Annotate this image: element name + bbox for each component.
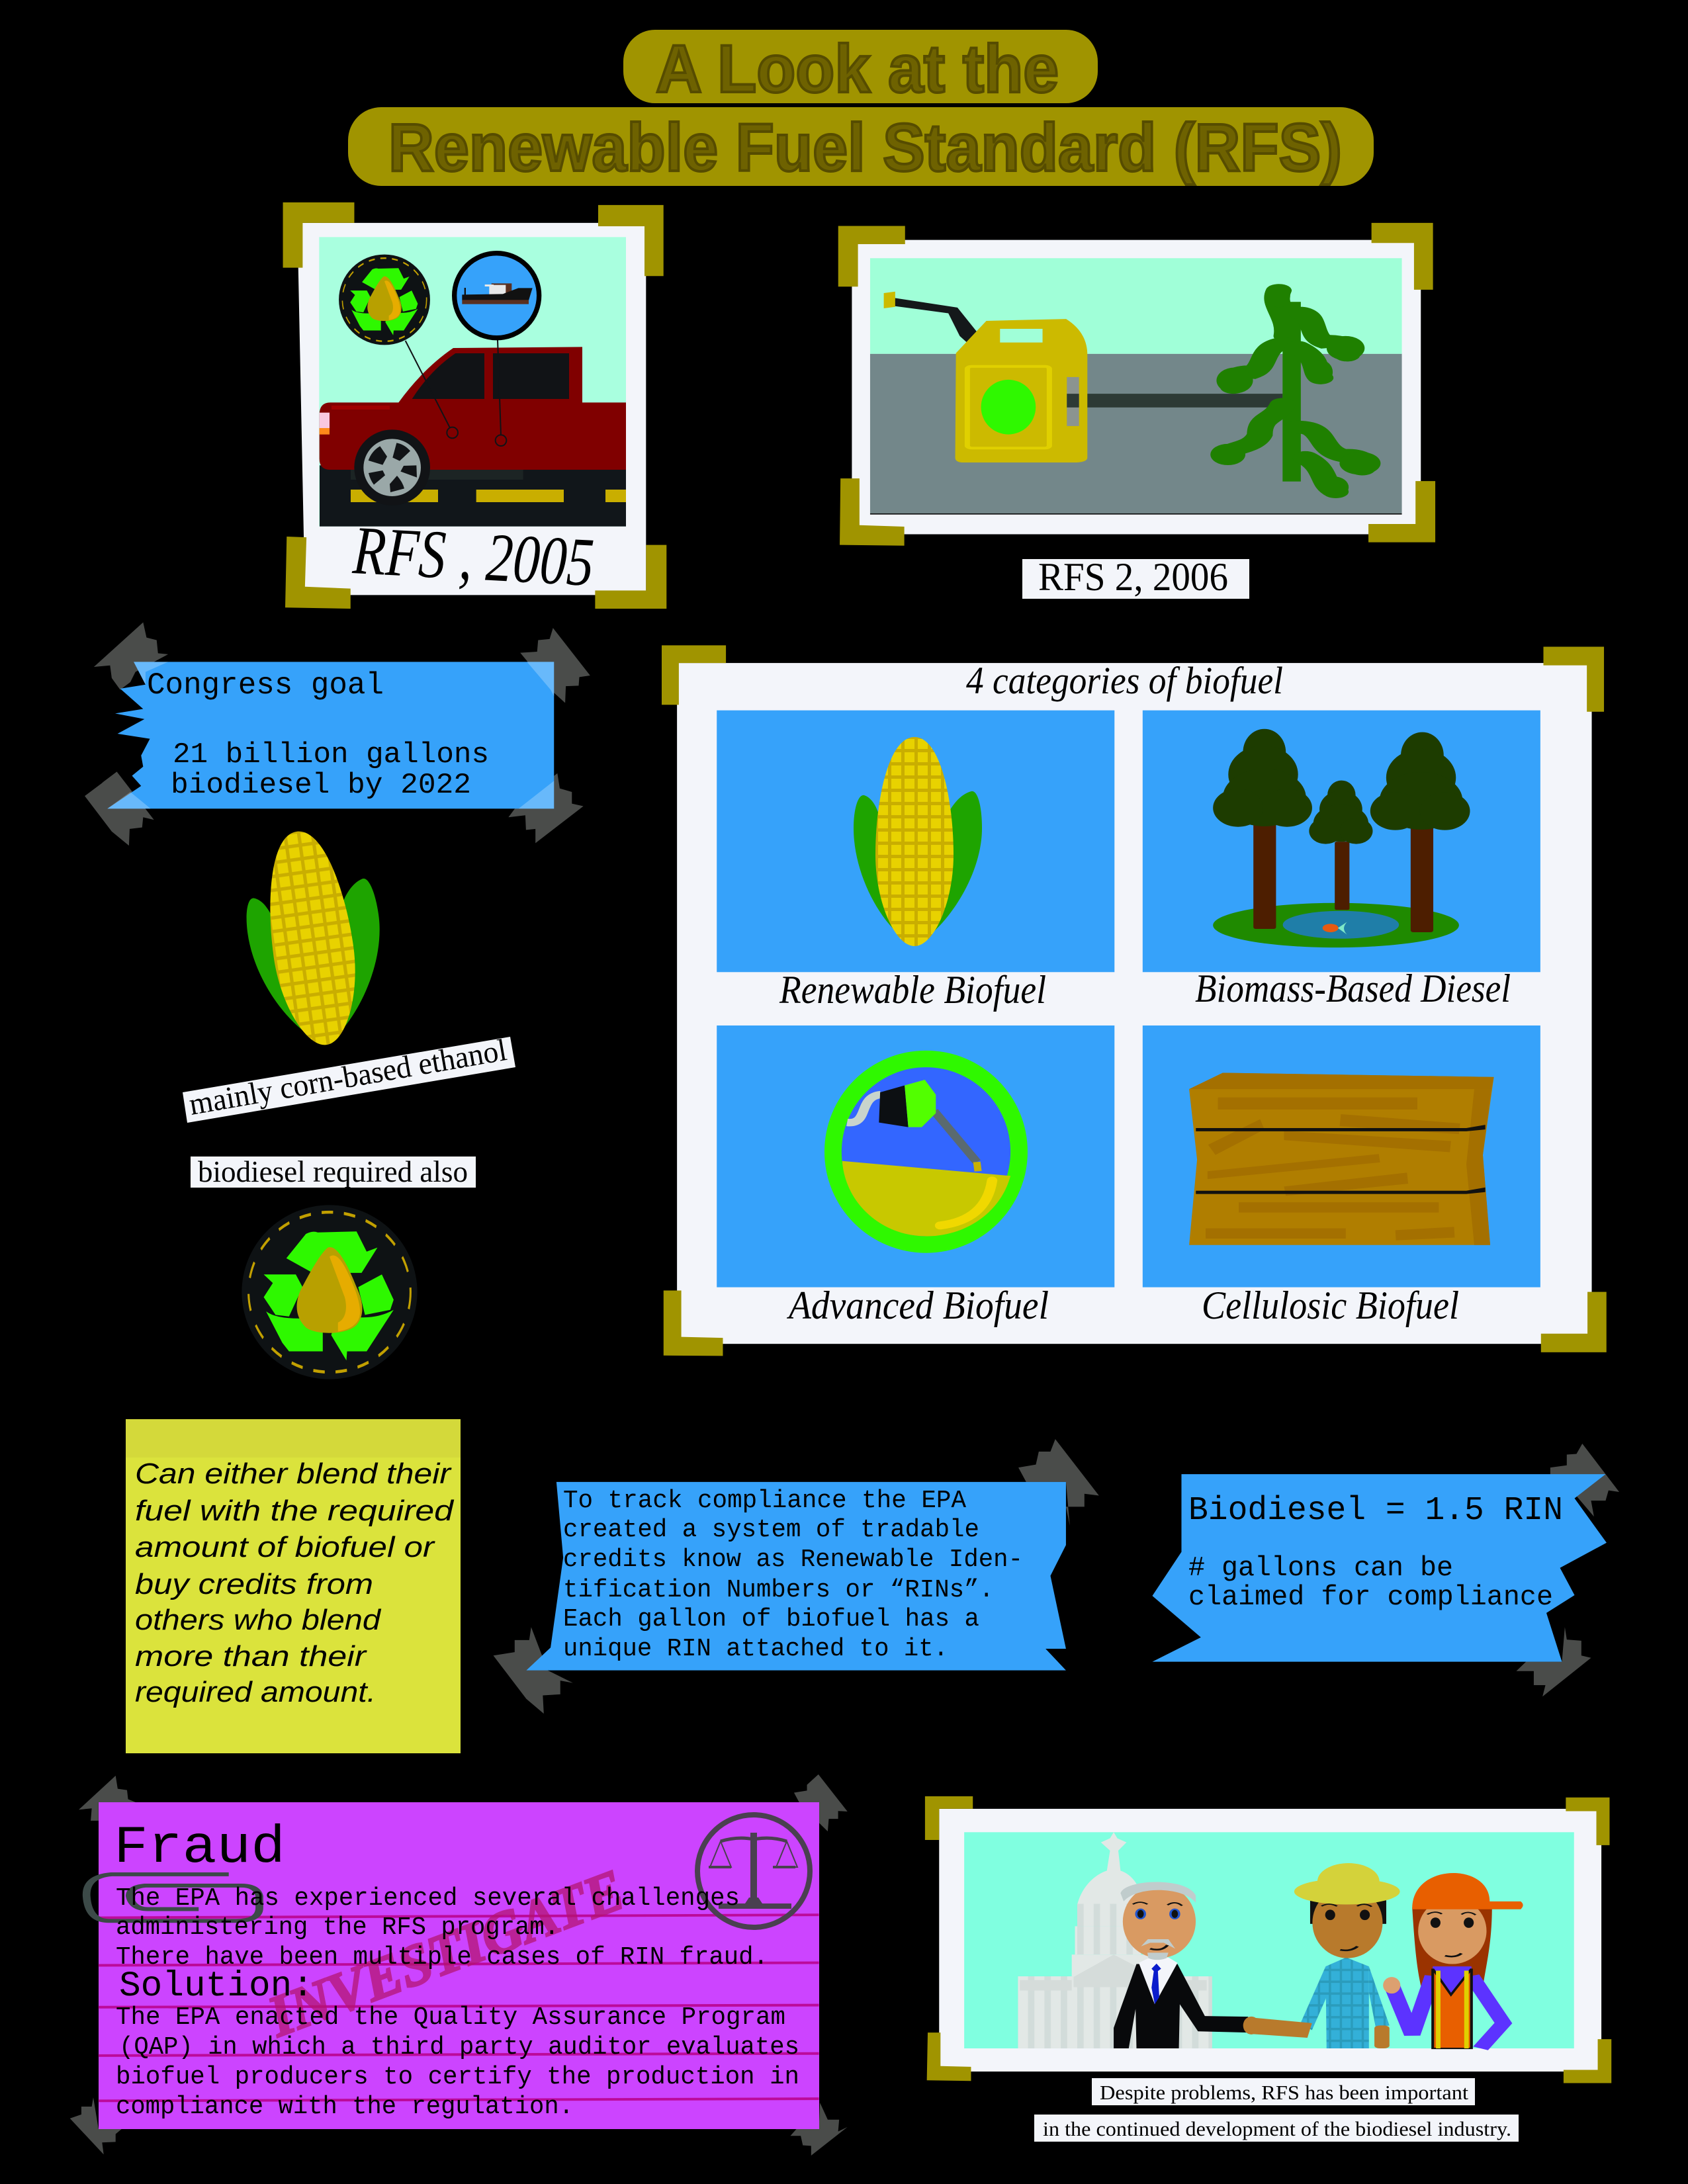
illustration: worker [1383, 1873, 1523, 2048]
text: solution body: biofuel producers to certify the production in [116, 2063, 799, 2091]
sticky note: blend or buy credits: fuel with the required [135, 1495, 455, 1527]
icon: paper clip [87, 1874, 259, 1921]
label: cellulosic biofuel: Cellulosic Biofuel [1202, 1284, 1459, 1327]
text: fraud body [116, 1884, 768, 1972]
sticky note: blend or buy credits [126, 1419, 461, 1753]
callout: Biodiesel RIN value [1152, 1444, 1619, 1696]
callout: RIN tracking: unique RIN attached to it. [563, 1635, 948, 1663]
text: solution body: (QAP) in which a third party auditor evaluates [119, 2033, 799, 2062]
panel: people at Capitol photo [925, 1796, 1611, 2083]
caption: continued development: in the continued development of the biodiesel industry. [1043, 2117, 1511, 2140]
icon: ship badge [455, 253, 539, 338]
sticky note: blend or buy credits: more than their [135, 1640, 368, 1673]
photo corners [283, 202, 666, 609]
icon: trees and pond [1213, 729, 1470, 947]
label: biodiesel required also: biodiesel required also [198, 1155, 468, 1188]
icon: renewable biofuel corn [854, 737, 982, 946]
sticky note: blend or buy credits: others who blend [135, 1604, 382, 1636]
panel: RFS 2005 photo [283, 202, 666, 609]
icon: fuel can [884, 292, 1087, 462]
stamp: investigate: INVESTIGATE [259, 1858, 633, 2050]
heading: Fraud: Fraud [114, 1818, 285, 1878]
callout: RIN tracking: tification Numbers or “RINs”. [563, 1576, 994, 1604]
illustration: farmer [1243, 1863, 1400, 2048]
text: solution body: compliance with the regulation. [116, 2093, 574, 2121]
photo corners [838, 223, 1435, 546]
illustration: official [1114, 1882, 1248, 2048]
callout: RIN tracking: created a system of tradable [563, 1516, 979, 1544]
icon: biodiesel badge small [339, 255, 430, 345]
illustration: Capitol building [1018, 1832, 1212, 2048]
icon: plant [1210, 284, 1380, 498]
panel: RFS 2 2006 photo [838, 223, 1435, 546]
photo corners [662, 645, 1607, 1356]
text: fraud body: There have been multiple cases of RIN fraud. [116, 1943, 768, 1972]
photo corners [925, 1796, 1611, 2083]
truck scene [319, 237, 626, 527]
caption: RFS, 2005: RFS , 2005 [351, 512, 596, 601]
callout: Biodiesel RIN value: claimed for compliance [1188, 1581, 1553, 1613]
sticky note: blend or buy credits: amount of biofuel or [135, 1531, 436, 1563]
label: mainly corn-based ethanol: mainly corn-based ethanol [187, 1033, 510, 1122]
callout: Biodiesel RIN value: Biodiesel = 1.5 RIN [1188, 1492, 1563, 1530]
caption: despite problems: Despite problems, RFS has been important [1100, 2081, 1468, 2104]
text: fraud body: The EPA has experienced several challenges [116, 1884, 740, 1913]
callout: RIN tracking: To track compliance the EPA [563, 1487, 966, 1515]
title: Renewable Fuel Standard (RFS) [388, 110, 1342, 185]
heading: 4 categories of biofuel [966, 659, 1283, 702]
sticky note: blend or buy credits: Can either blend their [135, 1458, 453, 1490]
text: solution body: The EPA enacted the Quality Assurance Program [116, 2003, 785, 2032]
callout: RIN tracking: Each gallon of biofuel has a [563, 1605, 979, 1634]
panel: 4 categories of biofuel [662, 645, 1607, 1356]
sticky note: blend or buy credits: required amount. [135, 1676, 376, 1708]
icon: hay bale [1189, 1073, 1494, 1245]
callout: Congress goal: 21 billion gallons [173, 738, 489, 771]
callout: Congress goal [85, 623, 590, 846]
label: biomass-based diesel: Biomass-Based Diesel [1195, 967, 1511, 1010]
heading: Solution: Solution: [119, 1966, 314, 2007]
callout: Congress goal: biodiesel by 2022 [171, 769, 471, 802]
caption: RFS 2, 2006: RFS 2, 2006 [1038, 555, 1228, 599]
callout: RIN tracking [494, 1439, 1099, 1714]
icon: corn [235, 822, 396, 1053]
icon: fuel pump nozzle [824, 1051, 1028, 1253]
callout: RIN tracking: credits know as Renewable Iden- [563, 1546, 1023, 1574]
panel: Fraud [70, 1774, 848, 2156]
icon: justice scale stamp [697, 1815, 810, 1927]
label: advanced biofuel: Advanced Biofuel [786, 1284, 1049, 1327]
label: renewable biofuel: Renewable Biofuel [779, 968, 1046, 1012]
callout: Congress goal: Congress goal [147, 668, 384, 703]
text: solution body [116, 2003, 799, 2121]
title: A Look at the [656, 31, 1059, 107]
text: fraud body: administering the RFS program. [116, 1913, 559, 1942]
sticky note: blend or buy credits: buy credits from [135, 1568, 373, 1600]
title [348, 30, 1374, 186]
callout: Biodiesel RIN value: # gallons can be [1188, 1552, 1453, 1584]
icon: biodiesel badge [242, 1205, 418, 1379]
